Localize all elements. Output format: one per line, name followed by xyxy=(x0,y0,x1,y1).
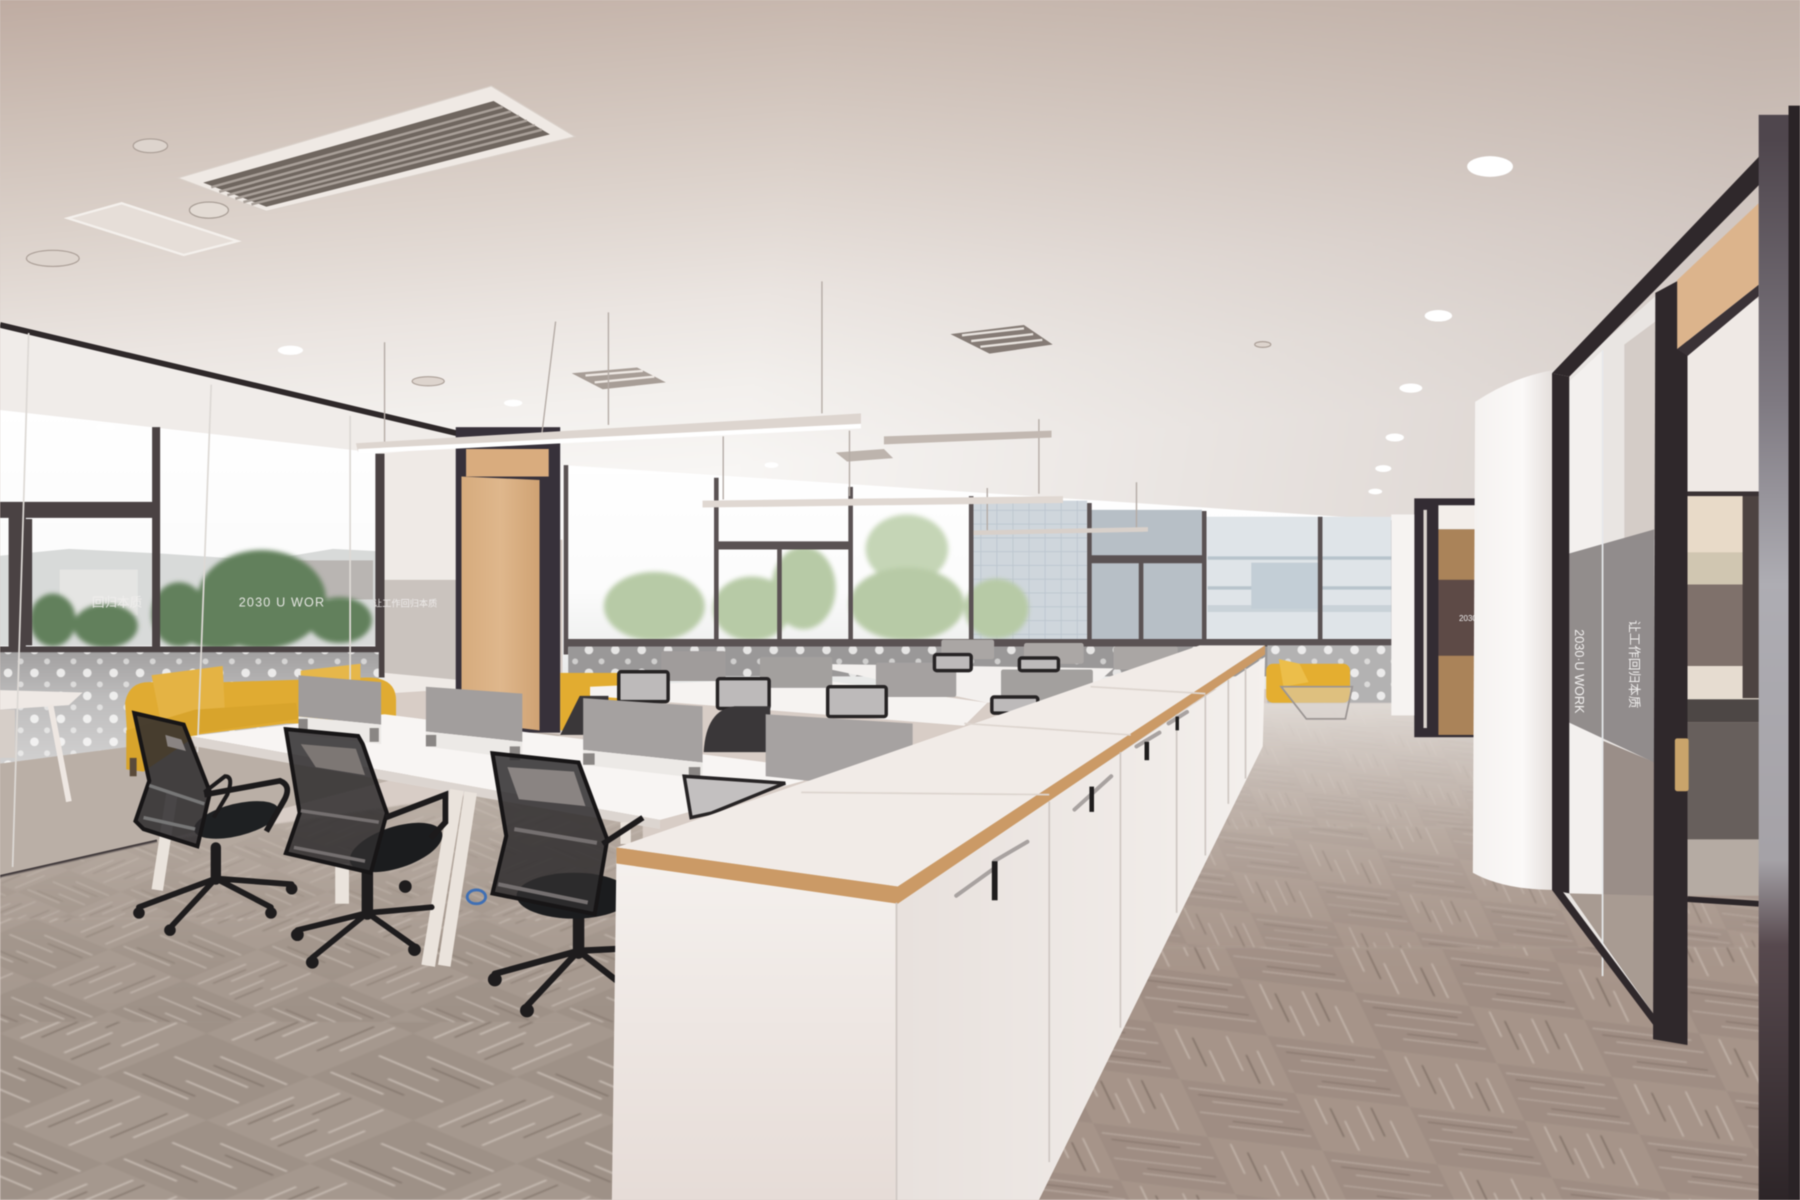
chair 2 mesh back xyxy=(286,729,387,873)
frosted sign text xyxy=(1572,620,1641,714)
privacy screen 4 xyxy=(766,714,913,781)
front desk xyxy=(157,675,913,966)
chair 3 star base xyxy=(495,914,626,1011)
office chair 4 xyxy=(684,776,785,818)
wood transom xyxy=(1677,203,1759,349)
door side strip xyxy=(1759,115,1790,1200)
chair 2 arm xyxy=(386,795,445,838)
office chair 1 xyxy=(134,713,292,930)
ceiling xyxy=(0,0,1800,540)
pendant strip 3 xyxy=(884,431,1052,444)
far meeting room xyxy=(1414,498,1477,737)
small table in room xyxy=(0,690,83,802)
carpet floor right xyxy=(1010,703,1768,1200)
dark chair shells xyxy=(560,696,770,752)
right glass wall xyxy=(1552,106,1800,1200)
frosted sign text: 2030 U WOR xyxy=(239,595,325,609)
left glass meeting room xyxy=(0,325,562,877)
far yellow sofa xyxy=(1266,659,1352,719)
white pillar xyxy=(1473,370,1555,890)
door frames xyxy=(1552,114,1800,1045)
round diffusers xyxy=(26,139,1271,386)
far meeting room: 2030 xyxy=(1459,614,1477,623)
yellow sofa behind glass xyxy=(560,673,624,730)
wall segment beside door xyxy=(385,446,457,694)
downlights xyxy=(96,156,1513,494)
air vent center xyxy=(572,367,666,389)
carpet floor left xyxy=(0,769,643,1200)
back screen 7 xyxy=(1114,647,1178,669)
frosted sign text: 回归本质 xyxy=(92,595,142,609)
door end post xyxy=(1789,106,1800,1200)
cabinet wood edge xyxy=(616,645,1265,904)
cabinet door seams xyxy=(897,668,1246,1200)
air vent right xyxy=(951,325,1053,354)
back screen 1 xyxy=(661,651,726,681)
frosted sign text: 让工作回归本质 xyxy=(1627,620,1641,708)
far buildings xyxy=(971,501,1394,643)
desk legs xyxy=(157,790,626,966)
frosted sign text xyxy=(92,595,437,609)
top seams xyxy=(801,687,1205,795)
back screen 2 xyxy=(760,657,832,688)
reflected pillar in pane xyxy=(1569,350,1603,896)
reflected carpet in pane xyxy=(1569,893,1655,1016)
reflected lower wall in pane xyxy=(1603,741,1655,1016)
trees outside xyxy=(604,514,1029,641)
frosted sign text: 让工作回归本质 xyxy=(373,597,437,608)
room ceiling xyxy=(0,325,465,454)
glass pane xyxy=(1557,296,1655,1028)
chair 1 seat xyxy=(190,794,283,846)
privacy screen 2 xyxy=(426,687,522,760)
perforated balustrade xyxy=(568,647,1280,676)
frosted sign text: 2030·U WORK xyxy=(1572,629,1586,714)
back chairs xyxy=(619,655,1058,717)
desk top xyxy=(191,714,804,820)
air vent far xyxy=(836,449,893,462)
chair 1 mesh back xyxy=(134,713,210,846)
back window wall xyxy=(562,465,1395,705)
cabinet front end xyxy=(612,856,895,1200)
access panel xyxy=(68,203,238,255)
yellow sofa xyxy=(125,664,396,776)
pendant wires xyxy=(385,281,1136,531)
glass partition frame xyxy=(0,325,465,877)
sky through windows xyxy=(562,465,1395,689)
chair 3 arm xyxy=(603,818,643,844)
wooden door xyxy=(456,427,560,733)
privacy screen 1 xyxy=(298,675,381,744)
large air vent xyxy=(178,86,575,211)
pendant lights xyxy=(356,281,1148,535)
privacy screen 3 xyxy=(583,698,703,779)
room floor xyxy=(0,714,562,877)
far pillar xyxy=(1391,514,1414,715)
chair 1 star base xyxy=(139,847,292,930)
room window frames xyxy=(0,427,385,678)
chair 2 star base xyxy=(297,873,432,962)
cabinet handles xyxy=(956,712,1187,896)
trees in room view xyxy=(30,550,372,649)
pendant strip 2 xyxy=(703,496,1063,508)
frosted glass band xyxy=(1561,529,1654,762)
window frames xyxy=(566,465,1394,655)
perforated balustrade room xyxy=(0,652,379,764)
pendant strip 4 xyxy=(973,527,1148,535)
back screen 6 xyxy=(1024,643,1084,664)
door handle xyxy=(1675,738,1689,791)
room windows xyxy=(0,410,385,689)
ceiling fittings xyxy=(26,86,1513,494)
cabinet long side xyxy=(895,657,1265,1200)
office chair 2 xyxy=(286,729,448,962)
interior seen through door xyxy=(1688,299,1760,904)
reflected room in pane xyxy=(1624,322,1655,540)
cabinet top xyxy=(616,645,1265,887)
back desk row xyxy=(560,640,1178,752)
chair 2 seat xyxy=(344,813,448,882)
storage cabinet row xyxy=(612,645,1265,1200)
chair 3 seat xyxy=(517,873,631,919)
blue cable on floor xyxy=(467,890,486,904)
back screen 3 xyxy=(876,663,956,697)
chair 3 mesh back xyxy=(492,753,607,914)
back screen 4 xyxy=(1001,669,1093,702)
cabinet locks xyxy=(992,717,1179,900)
office chair 3 xyxy=(492,753,643,1011)
distant hill and buildings xyxy=(0,549,379,645)
chair 1 arm xyxy=(204,781,287,831)
back screen 5 xyxy=(941,640,994,659)
small sensor xyxy=(189,202,228,218)
pendant strip 1 xyxy=(356,413,861,452)
